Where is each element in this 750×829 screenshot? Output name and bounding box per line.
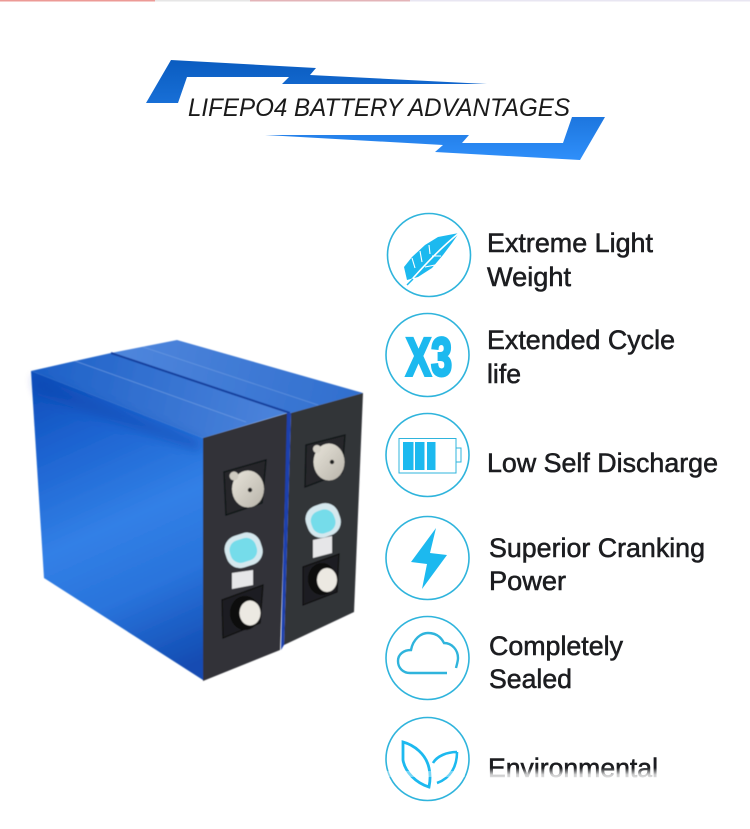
- icon: feather: [388, 214, 470, 296]
- feature text: life: [487, 359, 521, 389]
- icon: cloud: [386, 616, 469, 700]
- battery: rear cell white label: [313, 536, 332, 558]
- feature text: Weight: [487, 262, 572, 292]
- feature: extended cycle life: [386, 314, 675, 396]
- feature text: Power: [489, 566, 566, 596]
- battery: front cell top face: [31, 353, 287, 438]
- icon: leaves: [386, 718, 469, 800]
- banner: lower bolt shape: [265, 117, 605, 160]
- feature: environmental: [385, 718, 670, 800]
- icon: lightning bolt: [386, 516, 469, 600]
- feature: low self discharge: [386, 414, 718, 496]
- battery: front cell dark end panel: [203, 413, 288, 681]
- feature text: Extended Cycle: [487, 325, 675, 355]
- banner: upper bolt shape: [146, 60, 487, 103]
- battery: front cell white label: [232, 570, 253, 589]
- icon: X3: [386, 314, 469, 396]
- feature: completely sealed: [386, 616, 624, 700]
- battery: front cell vent: [221, 529, 266, 572]
- feature text: Sealed: [489, 664, 572, 694]
- feature text: Environmental: [488, 753, 658, 783]
- battery product image: [31, 340, 363, 681]
- battery: front cell negative terminal: [222, 585, 263, 638]
- icon: battery: [386, 414, 469, 496]
- feature: superior cranking power: [386, 516, 705, 600]
- battery: front cell positive terminal: [224, 460, 266, 515]
- feature text: Low Self Discharge: [487, 448, 718, 478]
- feature text: Superior Cranking: [489, 533, 705, 563]
- battery: rear cell dark end panel: [284, 393, 363, 645]
- title banner: [146, 60, 605, 160]
- feature: extreme light weight: [388, 214, 654, 296]
- title text: LIFEPO4 BATTERY ADVANTAGES: [188, 94, 570, 122]
- top edge colour strip: [0, 0, 750, 2]
- battery: rear cell top face: [111, 340, 363, 413]
- feature text: Completely: [489, 631, 624, 661]
- icon: X3: X3: [406, 328, 452, 388]
- battery: front cell side face: [31, 371, 203, 680]
- battery: rear cell negative terminal: [303, 554, 339, 605]
- battery: rear cell positive terminal: [305, 435, 345, 487]
- battery: rear cell vent: [302, 499, 345, 542]
- feature text: Extreme Light: [487, 228, 654, 258]
- battery: blue gap between cells: [281, 413, 291, 650]
